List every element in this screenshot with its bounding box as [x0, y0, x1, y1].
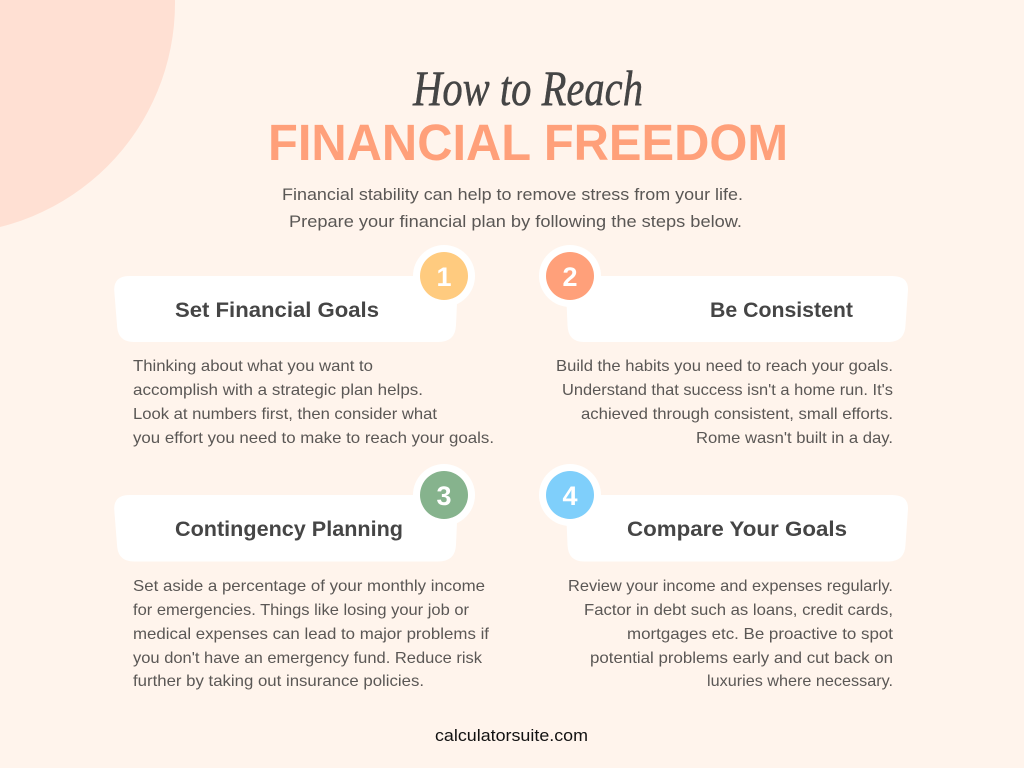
number badge 3	[413, 464, 475, 526]
body text 2: achieved through consistent, small efforts.	[581, 406, 893, 423]
body text 2: Rome wasn't built in a day.	[696, 430, 893, 447]
panel: step 2	[539, 245, 908, 447]
footer website: calculatorsuite.com	[435, 726, 588, 745]
number badge 1: 1	[436, 262, 452, 292]
card heading 1 background	[114, 276, 458, 342]
heading: contingency planning: Contingency Planning	[175, 518, 403, 541]
intro text	[282, 185, 743, 231]
body text 4: luxuries where necessary.	[707, 673, 893, 690]
intro text: Prepare your financial plan by following the steps below.	[289, 212, 742, 231]
number badge 4: 4	[562, 481, 578, 511]
heading: compare your goals: Compare Your Goals	[627, 518, 847, 541]
body text 3: Set aside a percentage of your monthly income	[133, 578, 485, 595]
number badge 4	[539, 464, 601, 526]
body text 3: further by taking out insurance policies.	[133, 673, 424, 690]
body text 4	[568, 578, 894, 690]
title main line: FINANCIAL FREEDOM	[268, 114, 788, 171]
panel: step 1	[114, 245, 494, 447]
panel: step 3	[114, 464, 490, 690]
body text 1: Look at numbers first, then consider what	[133, 406, 438, 423]
body text 1: you effort you need to make to reach your goals.	[133, 430, 494, 447]
number badge 2	[539, 245, 601, 307]
body text 3: for emergencies. Things like losing your job or	[133, 602, 470, 619]
body text 2: Understand that success isn't a home run. It's	[562, 382, 893, 399]
body text 4: Factor in debt such as loans, credit cards,	[584, 602, 893, 619]
body text 1	[133, 358, 494, 447]
body text 4: potential problems early and cut back on	[590, 650, 893, 667]
body text 2: Build the habits you need to reach your goals.	[556, 358, 893, 375]
body text 3: medical expenses can lead to major problems if	[133, 626, 490, 643]
body text 4: mortgages etc. Be proactive to spot	[627, 626, 894, 643]
body text 4: Review your income and expenses regularly.	[568, 578, 893, 595]
card heading 2 background	[566, 276, 908, 342]
body text 3	[133, 578, 490, 690]
panel: step 4	[539, 464, 908, 690]
body text 3: you don't have an emergency fund. Reduce risk	[133, 650, 483, 667]
number badge 2: 2	[562, 262, 578, 292]
title script line: How to Reach	[412, 60, 643, 116]
decorative corner circle	[0, 0, 175, 234]
number badge 1	[413, 245, 475, 307]
card heading 3 background	[114, 495, 458, 562]
intro text: Financial stability can help to remove stress from your life.	[282, 185, 743, 204]
heading: set financial goals: Set Financial Goals	[175, 299, 379, 322]
card heading 4 background	[566, 495, 908, 562]
body text 1: accomplish with a strategic plan helps.	[133, 382, 423, 399]
body text 1: Thinking about what you want to	[133, 358, 373, 375]
number badge 3: 3	[436, 481, 452, 511]
body text 2	[556, 358, 893, 447]
heading: be consistent: Be Consistent	[710, 299, 853, 322]
